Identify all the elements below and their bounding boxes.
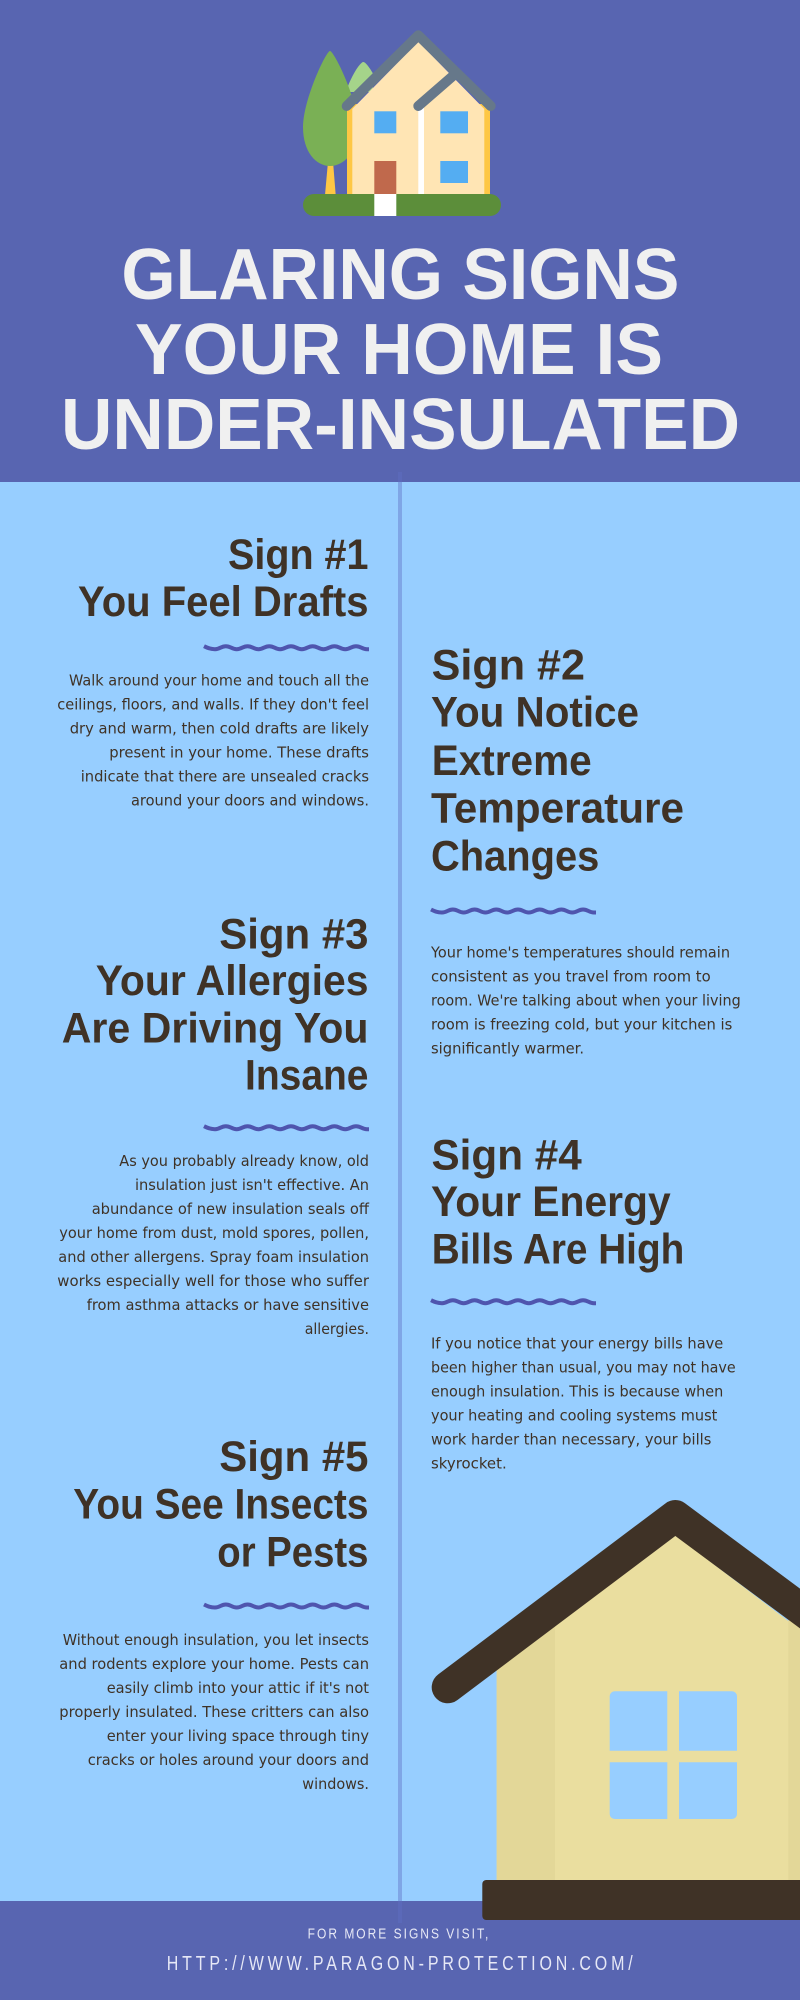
house base	[482, 1880, 800, 1920]
body text	[59, 1631, 369, 1793]
heading: sign 5: You See Insects	[73, 1481, 369, 1529]
body text: consistent as you travel from room to	[431, 967, 711, 985]
wall shading left	[497, 1626, 555, 1885]
body text: indicate that there are unsealed cracks	[81, 768, 369, 786]
heading: sign 4: Your Energy	[431, 1178, 671, 1226]
body text: If you notice that your energy bills have	[431, 1334, 723, 1352]
body text: Walk around your home and touch all the	[69, 672, 369, 690]
heading: sign 5	[73, 1433, 369, 1577]
door	[374, 161, 396, 194]
title: YOUR HOME IS	[135, 310, 663, 390]
heading: sign 4: Sign #4	[432, 1131, 582, 1179]
body text: been higher than usual, you may not have	[431, 1358, 736, 1376]
house side walls	[347, 104, 490, 194]
heading: sign 3: Your Allergies	[96, 957, 368, 1005]
window	[440, 111, 468, 133]
panel: sign 4	[431, 1131, 736, 1472]
body text	[57, 672, 369, 810]
wavy divider	[431, 910, 596, 912]
body text: room. We're talking about when your living	[431, 991, 741, 1009]
roof	[448, 1516, 800, 1687]
body text: easily climb into your attic if it's not	[107, 1679, 369, 1697]
body text: insulation just isn't effective. An	[135, 1176, 369, 1194]
window panes	[610, 1691, 737, 1819]
body text: properly insulated. These critters can also	[59, 1703, 369, 1721]
body text: and other allergens. Spray foam insulation	[58, 1248, 369, 1266]
dark tree	[303, 51, 358, 166]
icon: house with trees	[303, 35, 501, 216]
heading: sign 1	[78, 531, 368, 626]
body text: cracks or holes around your doors and	[88, 1751, 369, 1769]
dark tree trunk	[325, 165, 336, 195]
lawn	[303, 194, 501, 216]
body text: enough insulation. This is because when	[431, 1382, 723, 1400]
body text	[430, 943, 741, 1057]
panel: sign 2	[430, 641, 741, 1057]
wavy divider	[431, 1300, 596, 1303]
wavy divider	[204, 646, 369, 649]
center divider line	[398, 472, 402, 1923]
body text: As you probably already know, old	[119, 1152, 369, 1170]
illustration: large house	[448, 1516, 800, 1920]
body text: your heating and cooling systems must	[431, 1406, 717, 1424]
heading: sign 2: You Notice	[431, 689, 639, 737]
heading: sign 3	[62, 910, 368, 1099]
heading: sign 3: Sign #3	[219, 910, 368, 958]
body text: work harder than necessary, your bills	[431, 1430, 711, 1448]
title	[61, 235, 740, 465]
panel: footer	[0, 1901, 800, 2000]
body text: windows.	[302, 1775, 369, 1793]
footer caption: FOR MORE SIGNS VISIT,	[308, 1925, 488, 1942]
heading: sign 4: Bills Are High	[432, 1225, 684, 1273]
body text: Your home's temperatures should remain	[430, 943, 730, 961]
panel: sign 3	[57, 910, 370, 1338]
body text: around your doors and windows.	[131, 792, 369, 810]
window	[440, 161, 468, 183]
body text	[57, 1152, 370, 1338]
heading: sign 2: Temperature	[431, 785, 684, 833]
body text: dry and warm, then cold drafts are likely	[70, 720, 369, 738]
body text: works especially well for those who suffer	[57, 1272, 370, 1290]
body text: significantly warmer.	[431, 1039, 584, 1057]
panel: main blue background	[0, 482, 800, 1901]
heading: sign 2: Sign #2	[432, 641, 585, 689]
heading: sign 3: Insane	[245, 1051, 368, 1099]
panel: sign 5	[59, 1433, 369, 1793]
title: GLARING SIGNS	[121, 235, 679, 315]
front path	[374, 194, 396, 216]
body text: from asthma attacks or have sensitive	[87, 1296, 369, 1314]
title: UNDER-INSULATED	[61, 385, 740, 465]
body text	[431, 1334, 736, 1472]
house wall	[497, 1535, 800, 1885]
body text: abundance of new insulation seals off	[92, 1200, 370, 1218]
body text: ceilings, floors, and walls. If they don't feel	[57, 696, 369, 714]
heading: sign 5: Sign #5	[219, 1433, 368, 1481]
light tree	[346, 62, 375, 92]
heading: sign 1: You Feel Drafts	[78, 578, 368, 626]
white wall strip	[418, 106, 424, 194]
body text: and rodents explore your home. Pests can	[59, 1655, 369, 1673]
body text: present in your home. These drafts	[109, 744, 369, 762]
house facade	[352, 42, 484, 194]
heading: sign 3: Are Driving You	[62, 1005, 368, 1053]
body text: room is freezing cold, but your kitchen is	[431, 1015, 732, 1033]
body text: skyrocket.	[431, 1454, 507, 1472]
roof	[347, 35, 491, 106]
wavy divider	[204, 1126, 369, 1129]
window	[374, 111, 396, 133]
panel: sign 1	[57, 531, 369, 810]
heading: sign 4	[431, 1131, 684, 1273]
body text: Without enough insulation, you let insects	[63, 1631, 369, 1649]
wavy divider	[204, 1604, 369, 1608]
heading: sign 5: or Pests	[217, 1529, 368, 1577]
heading: sign 2: Extreme	[432, 737, 592, 785]
body text: allergies.	[305, 1320, 369, 1338]
heading: sign 1: Sign #1	[228, 531, 368, 579]
heading: sign 2	[431, 641, 684, 881]
panel: header	[0, 0, 800, 482]
body text: your home from dust, mold spores, pollen,	[59, 1224, 369, 1242]
front gable roof	[418, 75, 454, 106]
body text: enter your living space through tiny	[107, 1727, 369, 1745]
footer link: HTTP://WWW.PARAGON-PROTECTION.COM/	[167, 1952, 634, 1974]
heading: sign 2: Changes	[431, 833, 599, 881]
wall shading right	[788, 1610, 800, 1885]
